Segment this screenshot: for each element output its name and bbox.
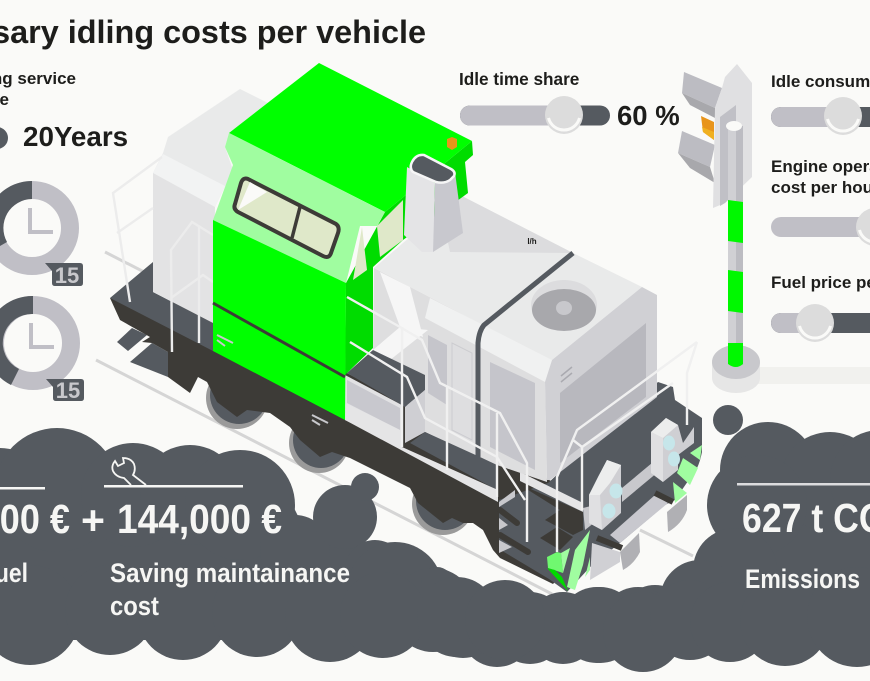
- saving maintenance text: [104, 458, 350, 621]
- knob: [856, 208, 870, 246]
- base: [712, 363, 760, 393]
- main hood: [373, 195, 657, 482]
- pole: [726, 121, 743, 367]
- frame blocks: [520, 472, 583, 512]
- door panels: [428, 335, 447, 405]
- donut chart 2: [0, 296, 84, 403]
- dark stripe: [478, 253, 573, 457]
- signal face: [713, 64, 752, 208]
- buffer right: [651, 418, 694, 482]
- rear deck: [110, 262, 213, 351]
- smoke cloud left: [0, 428, 475, 665]
- unit label: l/h: [527, 237, 537, 246]
- fan: [531, 280, 597, 331]
- buffer left: [583, 460, 622, 530]
- ground shadow: [750, 367, 870, 384]
- hazard chevrons: [547, 445, 702, 591]
- cab side window: [353, 227, 367, 280]
- front lower dark panel: [499, 382, 702, 592]
- vent marks: [561, 367, 572, 382]
- cab stripe: [213, 303, 345, 377]
- icon: wrench: [112, 458, 146, 485]
- value: 60 %: [617, 100, 680, 131]
- divider: [104, 485, 243, 488]
- nose side: [545, 287, 657, 480]
- cab rear side: [345, 141, 473, 375]
- rails: [96, 252, 693, 594]
- slider: engine operating cost: [771, 157, 870, 246]
- hood top: [374, 195, 642, 360]
- divider: [737, 483, 870, 486]
- knob: [824, 97, 862, 135]
- track: [460, 106, 610, 126]
- smoke cloud right: [417, 405, 870, 672]
- frame marks: [312, 415, 328, 425]
- panel: service life: [0, 69, 128, 152]
- maintenance caption: Saving maintainance: [110, 558, 350, 588]
- window: [234, 178, 339, 257]
- cab rear window: [377, 200, 403, 257]
- hood bevel: [425, 298, 552, 382]
- underframe flaps: [117, 328, 147, 351]
- track: [771, 313, 870, 333]
- nose panel: [560, 323, 646, 463]
- cab marks: [217, 335, 233, 346]
- badge: 15: [55, 263, 79, 288]
- white highlights: [380, 272, 423, 337]
- slider: fuel price: [771, 273, 870, 342]
- emissions text: [737, 483, 870, 594]
- rear hood: [153, 89, 270, 323]
- cab: [213, 63, 473, 425]
- hood shadow: [440, 195, 573, 253]
- years value: 20Years: [23, 121, 128, 152]
- maintenance value: 144,000 €: [117, 496, 282, 542]
- knob: [545, 96, 583, 134]
- badge: 15: [56, 378, 80, 403]
- slider: idle time share: [459, 69, 680, 134]
- saving fuel text: [0, 487, 70, 588]
- rear handrails: [113, 157, 213, 352]
- slider: idle consumption: [771, 72, 870, 135]
- knob: [796, 304, 834, 342]
- track: [771, 107, 870, 127]
- plus sign: +: [81, 497, 105, 543]
- divider: [0, 487, 45, 490]
- front handrails: [347, 297, 697, 552]
- slider end: [0, 127, 8, 149]
- hood side: [373, 268, 550, 482]
- cab roof: [229, 63, 472, 212]
- wheels: [206, 366, 474, 535]
- visor: [213, 133, 385, 283]
- chimney: [404, 155, 463, 252]
- signal post: [678, 64, 870, 393]
- maintenance caption second line: cost: [110, 591, 159, 621]
- locomotive: [110, 63, 702, 592]
- walkway: [345, 350, 498, 502]
- steps: [499, 490, 528, 553]
- beacon: [447, 137, 457, 150]
- dark frame: [110, 298, 590, 584]
- front beam and skirts: [590, 458, 687, 580]
- track: [771, 217, 870, 237]
- label: Idle time share: [459, 69, 579, 89]
- signal flaps: [682, 72, 722, 108]
- cab front: [213, 220, 346, 420]
- donut chart 1: [0, 181, 83, 288]
